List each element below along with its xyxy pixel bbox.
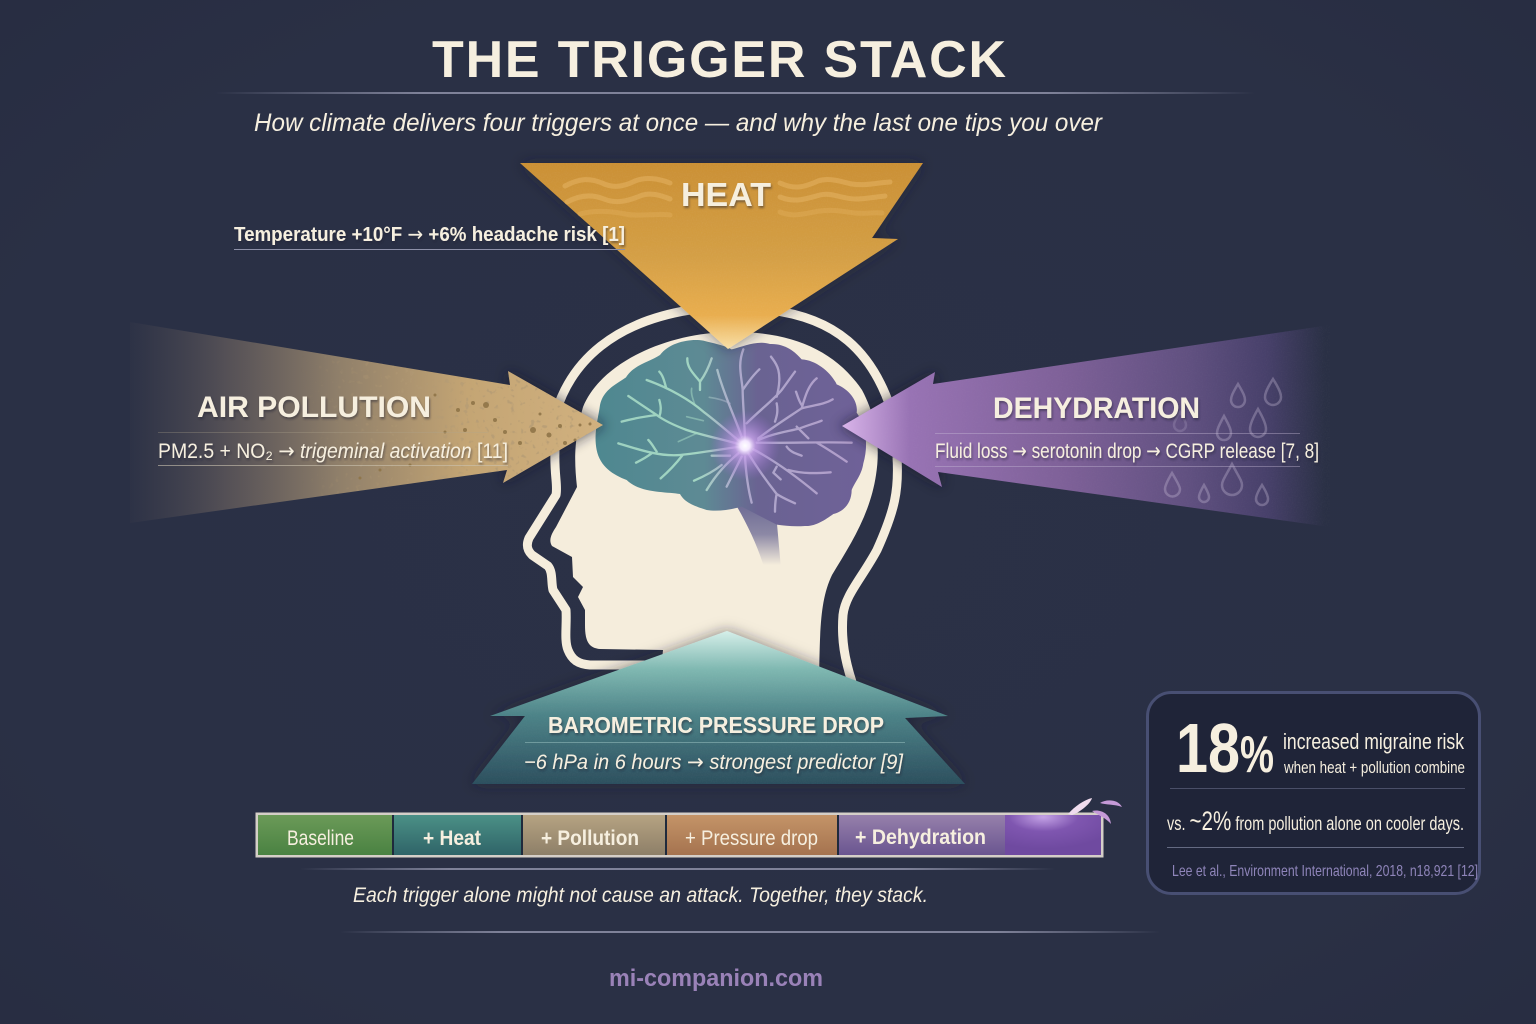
segment: heat: + Heat <box>423 827 481 850</box>
pollution label: AIR POLLUTION <box>197 391 431 424</box>
stacked trigger bar <box>256 798 1122 858</box>
pollution particles <box>358 364 592 491</box>
segment: tipping point <box>1005 815 1101 855</box>
segment: baseline: Baseline <box>287 827 354 850</box>
arrow: dehydration <box>839 325 1330 527</box>
heat stat line: Temperature +10°F → +6% headache risk [1] <box>234 222 625 246</box>
bar caption: Each trigger alone might not cause an attack. Together, they stack. <box>353 884 928 907</box>
arrow: barometric pressure <box>472 631 965 784</box>
segment: baseline <box>258 815 392 855</box>
stat headline: increased migraine risk <box>1283 729 1465 754</box>
segment: pressure drop <box>667 815 837 855</box>
pressure label: BAROMETRIC PRESSURE DROP <box>548 712 884 738</box>
brain <box>596 340 866 565</box>
segment: pollution: + Pollution <box>541 827 639 850</box>
overflow splash <box>1068 798 1122 824</box>
segment: dehydration <box>839 815 1005 855</box>
head outer outline <box>527 310 897 682</box>
heat waves <box>565 179 890 215</box>
arrow: heat <box>520 163 923 349</box>
comparison line: vs. ~2% from pollution alone on cooler days. <box>1167 806 1464 836</box>
big number: % <box>1240 726 1274 784</box>
segment: pollution <box>523 815 665 855</box>
brain lobes <box>596 340 866 526</box>
stat subline: when heat + pollution combine <box>1283 758 1465 777</box>
water drops <box>1165 379 1281 505</box>
brain stem <box>735 503 781 565</box>
arrow: air pollution <box>146 325 608 520</box>
dehydration label: DEHYDRATION <box>993 392 1200 425</box>
segment: heat <box>394 815 521 855</box>
pollution mechanism line: PM2.5 + NO₂ → trigeminal activation [11] <box>158 439 508 463</box>
footer url: mi-companion.com <box>609 965 823 992</box>
stat card <box>1148 692 1480 894</box>
pressure stat line: −6 hPa in 6 hours → strongest predictor [9] <box>524 750 904 774</box>
heat label: HEAT <box>681 176 771 213</box>
head silhouette <box>527 310 897 682</box>
title: THE TRIGGER STACK <box>432 31 1006 89</box>
head fill <box>550 332 878 680</box>
brain veins <box>618 349 852 512</box>
big number: 18 <box>1176 709 1240 787</box>
dehydration mechanism line: Fluid loss → serotonin drop → CGRP release [7, 8] <box>935 439 1319 463</box>
segment: pressure drop: + Pressure drop <box>685 827 818 850</box>
migraine glow <box>710 411 780 481</box>
segment: dehydration: + Dehydration <box>855 826 986 849</box>
subtitle: How climate delivers four triggers at once — and why the last one tips you over <box>254 109 1104 137</box>
